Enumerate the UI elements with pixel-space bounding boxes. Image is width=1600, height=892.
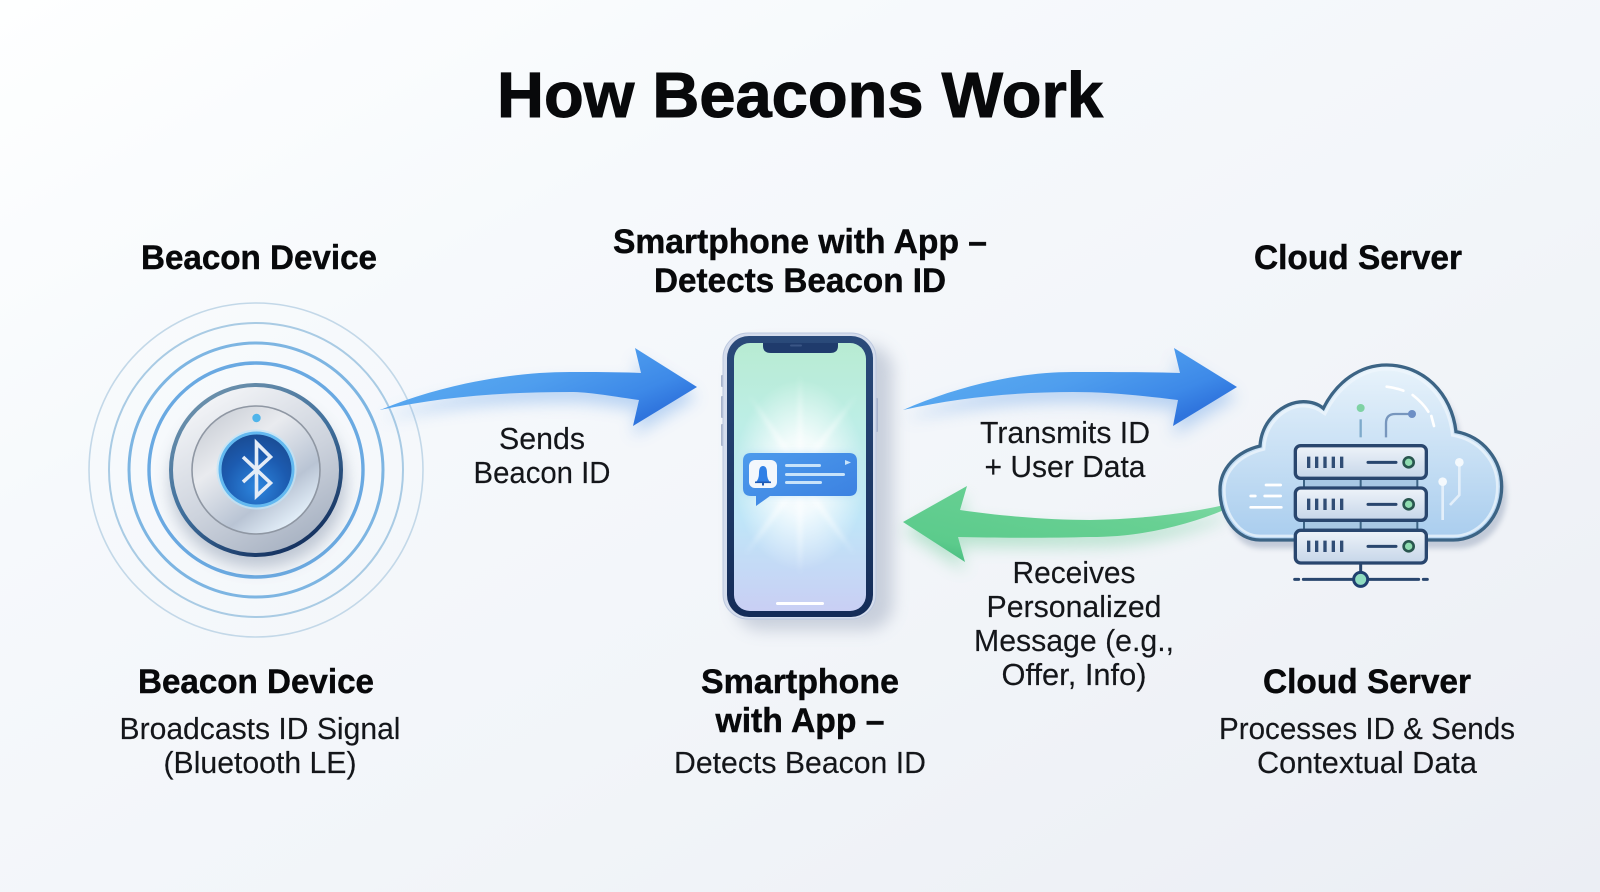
heading: cloud server: Cloud Server [1254,239,1462,277]
arrow label: receives personalized message: Personalized [986,589,1162,624]
arrow label: sends beacon id [474,421,610,490]
circuit traces [1357,404,1464,520]
arrow: transmits id [903,348,1237,436]
arrow label: sends beacon id: Beacon ID [474,455,610,490]
arrow label: transmits id [980,415,1150,484]
heading: smartphone with app: Detects Beacon ID [654,262,946,300]
icon: cloud server [1220,365,1507,586]
arrow: sends beacon id [380,348,697,436]
cloud shadow [1225,373,1507,548]
server unit 2 [1295,488,1426,520]
device body [171,385,341,555]
heading: smartphone with app [613,223,987,300]
caption: cloud server: Processes ID & Sends [1219,711,1515,746]
home indicator [776,602,824,605]
arrow label: sends beacon id: Sends [499,421,585,456]
screen glow [734,375,866,575]
status light [252,414,261,422]
caption: cloud server: Contextual Data [1257,745,1478,780]
caption: beacon device: Broadcasts ID Signal [120,711,400,746]
caption: smartphone with app: Detects Beacon ID [674,745,926,780]
phone side buttons [721,375,878,446]
heading: beacon device: Beacon Device [141,239,377,277]
notification bubble [743,453,857,506]
heading: smartphone with app: Smartphone with App – [613,223,987,261]
arrow label: receives personalized message: Receives [1012,555,1136,590]
arrow label: transmits id: Transmits ID [980,415,1150,450]
arrow: personalized message [903,486,1224,571]
server unit 3 [1295,530,1426,563]
caption: beacon device: Beacon Device [138,663,374,701]
message lines [785,460,851,484]
inner disc [192,406,320,534]
caption: smartphone with app [674,663,926,780]
server unit 1 [1295,446,1426,478]
server connectors [1304,478,1417,530]
arrow label: transmits id: + User Data [984,449,1146,484]
title: How Beacons Work [497,59,1103,131]
bluetooth badge [216,430,296,510]
caption: smartphone with app: Smartphone [701,663,899,701]
caption: beacon device [120,663,400,780]
arrow label: receives personalized message [974,555,1174,692]
signal rings [89,303,423,637]
phone screen [734,343,866,611]
caption: cloud server: Cloud Server [1263,663,1471,701]
caption: cloud server [1219,663,1515,780]
cloud inner rim [1224,369,1497,536]
device shadow [170,400,346,568]
cloud highlight [1251,387,1434,507]
cloud outline [1220,365,1502,540]
phone casing [723,333,876,619]
phone bezel [727,336,873,617]
arrow label: receives personalized message: Offer, Info) [1002,657,1146,692]
phone shadow [735,345,893,630]
notch [763,343,838,353]
arrow label: receives personalized message: Message (e.g., [974,623,1174,658]
network node [1295,563,1427,586]
icon: beacon device with signal rings [89,303,423,637]
bell icon [749,460,777,488]
caption: beacon device: (Bluetooth LE) [164,745,356,780]
icon: smartphone [721,333,893,630]
caption: smartphone with app: with App – [715,702,884,740]
